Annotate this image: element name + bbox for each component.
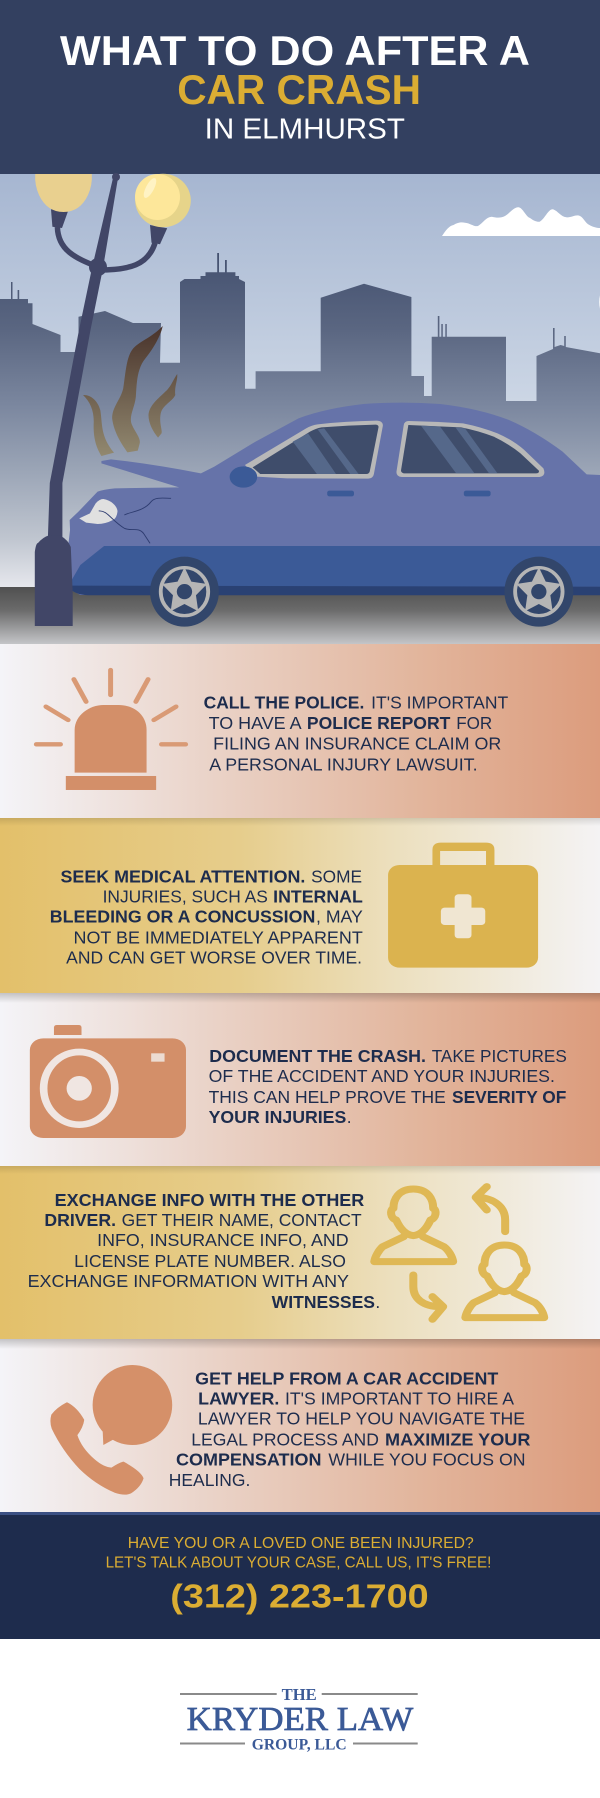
- panel: document the crash: [0, 993, 600, 1166]
- text: exchange info: GET THEIR NAME, CONTACT: [122, 1210, 362, 1230]
- text: get help from a lawyer: LAWYER TO HELP YOU NAVIGATE THE: [198, 1408, 525, 1428]
- text: call the police: [204, 692, 509, 774]
- text: get help from a lawyer: IT'S IMPORTANT TO HIRE A: [285, 1388, 514, 1408]
- car lower band: [69, 546, 600, 587]
- door handles: [327, 491, 491, 496]
- text: exchange info: LICENSE PLATE NUMBER. ALSO: [74, 1251, 346, 1271]
- text: call the police: FOR: [456, 713, 492, 733]
- logo: the kryder law group: [180, 1685, 418, 1753]
- text: seek medical attention: SEEK MEDICAL ATTENTION.: [60, 866, 305, 886]
- text: seek medical attention: [50, 866, 363, 967]
- text: seek medical attention: BLEEDING OR A CONCUSSION: [50, 906, 315, 926]
- text: get help from a lawyer: LAWYER.: [198, 1388, 279, 1408]
- phone number: (312) 223-1700: [170, 1577, 429, 1614]
- text: exchange info: .: [375, 1292, 380, 1312]
- cracks: [99, 498, 171, 543]
- text: document the crash: DOCUMENT THE CRASH.: [209, 1046, 426, 1066]
- smoke: [83, 326, 177, 456]
- text: get help from a lawyer: MAXIMIZE YOUR: [385, 1429, 531, 1449]
- text: seek medical attention: NOT BE IMMEDIATELY APPARENT: [74, 927, 363, 947]
- panel: get help from a lawyer: [0, 1339, 600, 1512]
- text: document the crash: SEVERITY OF: [452, 1087, 566, 1107]
- text: seek medical attention: , MAY: [316, 906, 363, 926]
- text: document the crash: TAKE PICTURES: [432, 1046, 567, 1066]
- header panel: [0, 0, 600, 174]
- panel: seek medical attention: [0, 818, 600, 993]
- rear wheel: [504, 557, 573, 627]
- arrow: up: [476, 1187, 505, 1232]
- right bulb: [135, 174, 191, 227]
- text: get help from a lawyer: COMPENSATION: [176, 1449, 322, 1469]
- icon: camera: [30, 1025, 186, 1138]
- text: seek medical attention: INTERNAL: [273, 886, 363, 906]
- text: document the crash: OF THE ACCIDENT AND YOUR INJURIES.: [209, 1066, 555, 1086]
- street lamp: [35, 173, 191, 626]
- text: document the crash: .: [347, 1107, 352, 1127]
- panel: call the police: [0, 644, 600, 818]
- lamp base: [35, 535, 73, 626]
- person two: [465, 1245, 544, 1318]
- city skyline: [0, 253, 600, 588]
- icon: two people exchanging info: [374, 1187, 544, 1319]
- car body: [68, 403, 600, 595]
- text: seek medical attention: SOME: [311, 866, 362, 886]
- cloud: [442, 207, 600, 236]
- icon: siren: [36, 670, 186, 790]
- call to action line one: HAVE YOU OR A LOVED ONE BEEN INJURED?: [128, 1535, 474, 1552]
- text: call the police: TO HAVE A: [209, 713, 302, 733]
- text: call the police: FILING AN INSURANCE CLAIM OR: [213, 733, 501, 753]
- text: document the crash: YOUR INJURIES: [209, 1107, 346, 1127]
- left bulb: [35, 174, 92, 212]
- text: exchange info: INFO, INSURANCE INFO, AND: [97, 1230, 349, 1250]
- text: call the police: IT'S IMPORTANT: [371, 692, 509, 712]
- text: exchange info: EXCHANGE INFORMATION WITH ANY: [28, 1271, 349, 1291]
- arrow: down: [413, 1275, 443, 1319]
- text: exchange info: DRIVER.: [44, 1210, 116, 1230]
- side mirror: [230, 466, 257, 488]
- text: document the crash: [209, 1046, 567, 1127]
- footer call to action panel: [0, 1512, 600, 1639]
- text: get help from a lawyer: LEGAL PROCESS AND: [191, 1429, 379, 1449]
- text: seek medical attention: INJURIES, SUCH AS: [103, 886, 268, 906]
- text: get help from a lawyer: GET HELP FROM A CAR ACCIDENT: [195, 1368, 499, 1388]
- icon: first aid kit: [388, 843, 538, 968]
- title: what to do after a: WHAT TO DO AFTER A: [60, 27, 530, 74]
- front window: [245, 421, 383, 479]
- rear window: [396, 421, 544, 477]
- call to action line two: LET'S TALK ABOUT YOUR CASE, CALL US, IT'S FREE!: [106, 1554, 491, 1571]
- panel: exchange info: [0, 1166, 600, 1339]
- distant sun edge: [599, 279, 600, 325]
- person one: [374, 1189, 453, 1262]
- front wheel: [150, 557, 219, 627]
- text: get help from a lawyer: WHILE YOU FOCUS ON: [328, 1449, 526, 1469]
- text: exchange info: WITNESSES: [272, 1292, 375, 1312]
- broken headlight: [79, 499, 117, 524]
- hero illustration: car crash scene: [0, 173, 600, 644]
- text: exchange info: [28, 1190, 380, 1312]
- text: call the police: A PERSONAL INJURY LAWSUIT.: [209, 754, 478, 774]
- subtitle: in elmhurst: IN ELMHURST: [205, 114, 405, 146]
- logo: the kryder law group: GROUP, LLC: [252, 1736, 347, 1753]
- text: call the police: POLICE REPORT: [307, 713, 451, 733]
- icon: phone with speech bubble: [52, 1365, 172, 1494]
- car underside: [69, 586, 600, 595]
- text: get help from a lawyer: HEALING.: [169, 1470, 250, 1490]
- text: get help from a lawyer: [169, 1368, 531, 1490]
- title: car crash: CAR CRASH: [177, 66, 421, 113]
- text: exchange info: EXCHANGE INFO WITH THE OTHER: [55, 1190, 365, 1210]
- car: [68, 403, 600, 627]
- text: seek medical attention: AND CAN GET WORSE OVER TIME.: [66, 947, 362, 967]
- road: [0, 587, 600, 644]
- text: document the crash: THIS CAN HELP PROVE THE: [209, 1087, 446, 1107]
- logo: the kryder law group: THE: [282, 1685, 317, 1704]
- logo: the kryder law group: KRYDER LAW: [187, 1701, 414, 1738]
- text: call the police: CALL THE POLICE.: [204, 692, 364, 712]
